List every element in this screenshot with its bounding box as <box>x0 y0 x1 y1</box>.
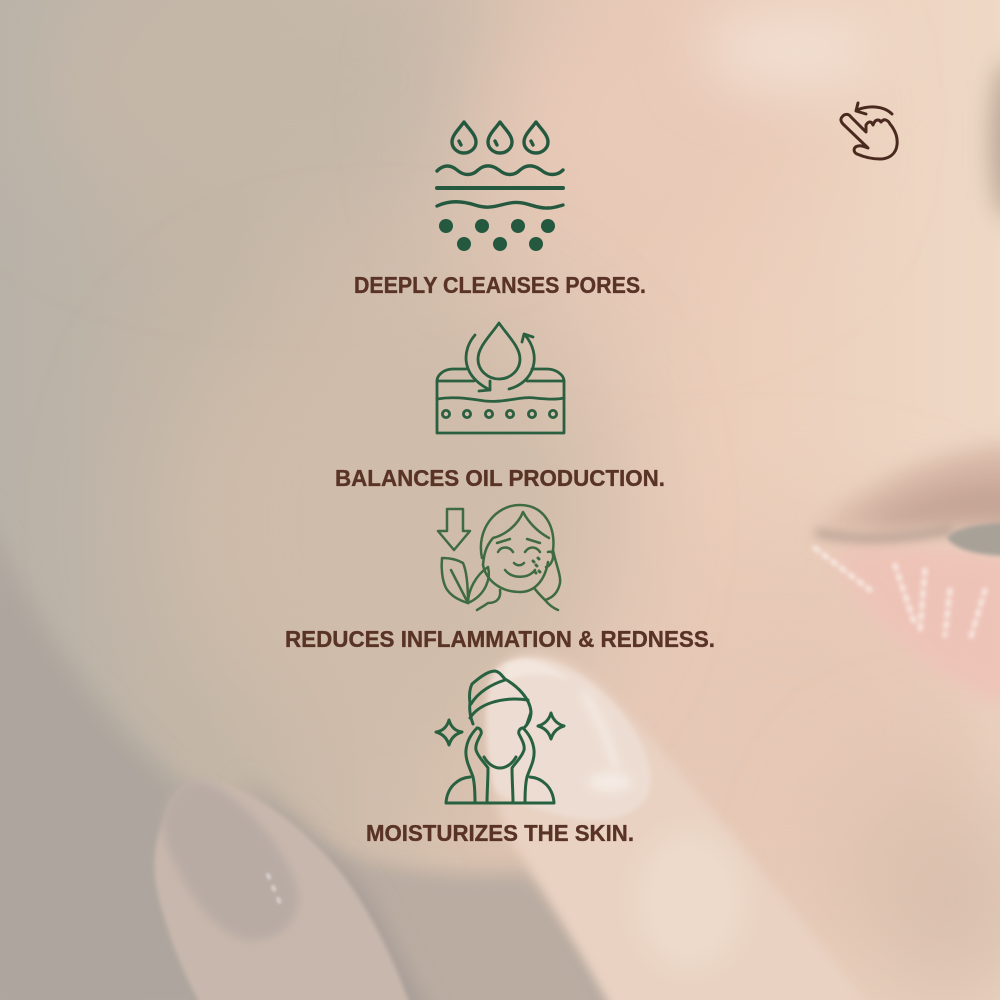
lower-left finger <box>154 780 412 1000</box>
heading: reduces inflammation and redness: REDUCES INFLAMMATION & REDNESS. <box>285 626 715 652</box>
heading: deeply cleanses pores: DEEPLY CLEANSES PORES. <box>354 272 646 298</box>
icon: droplets over skin layers <box>437 122 563 251</box>
icon part: skin lines <box>437 166 563 208</box>
heading: balances oil production: BALANCES OIL PRODUCTION. <box>335 465 665 491</box>
icon: calm face with leaf and down arrow <box>438 505 560 610</box>
pointing finger <box>486 653 872 1000</box>
shadow beside lower-left finger <box>240 780 430 1000</box>
icon: swipe hand <box>841 103 897 159</box>
icon part: pore dots <box>439 219 555 251</box>
heading: moisturizes the skin: MOISTURIZES THE SKIN. <box>366 820 634 846</box>
lips <box>815 445 1000 710</box>
icon: woman with towel and sparkles <box>436 671 564 803</box>
icon part: three drops <box>452 122 548 153</box>
icon: oil balance skin <box>437 323 564 433</box>
